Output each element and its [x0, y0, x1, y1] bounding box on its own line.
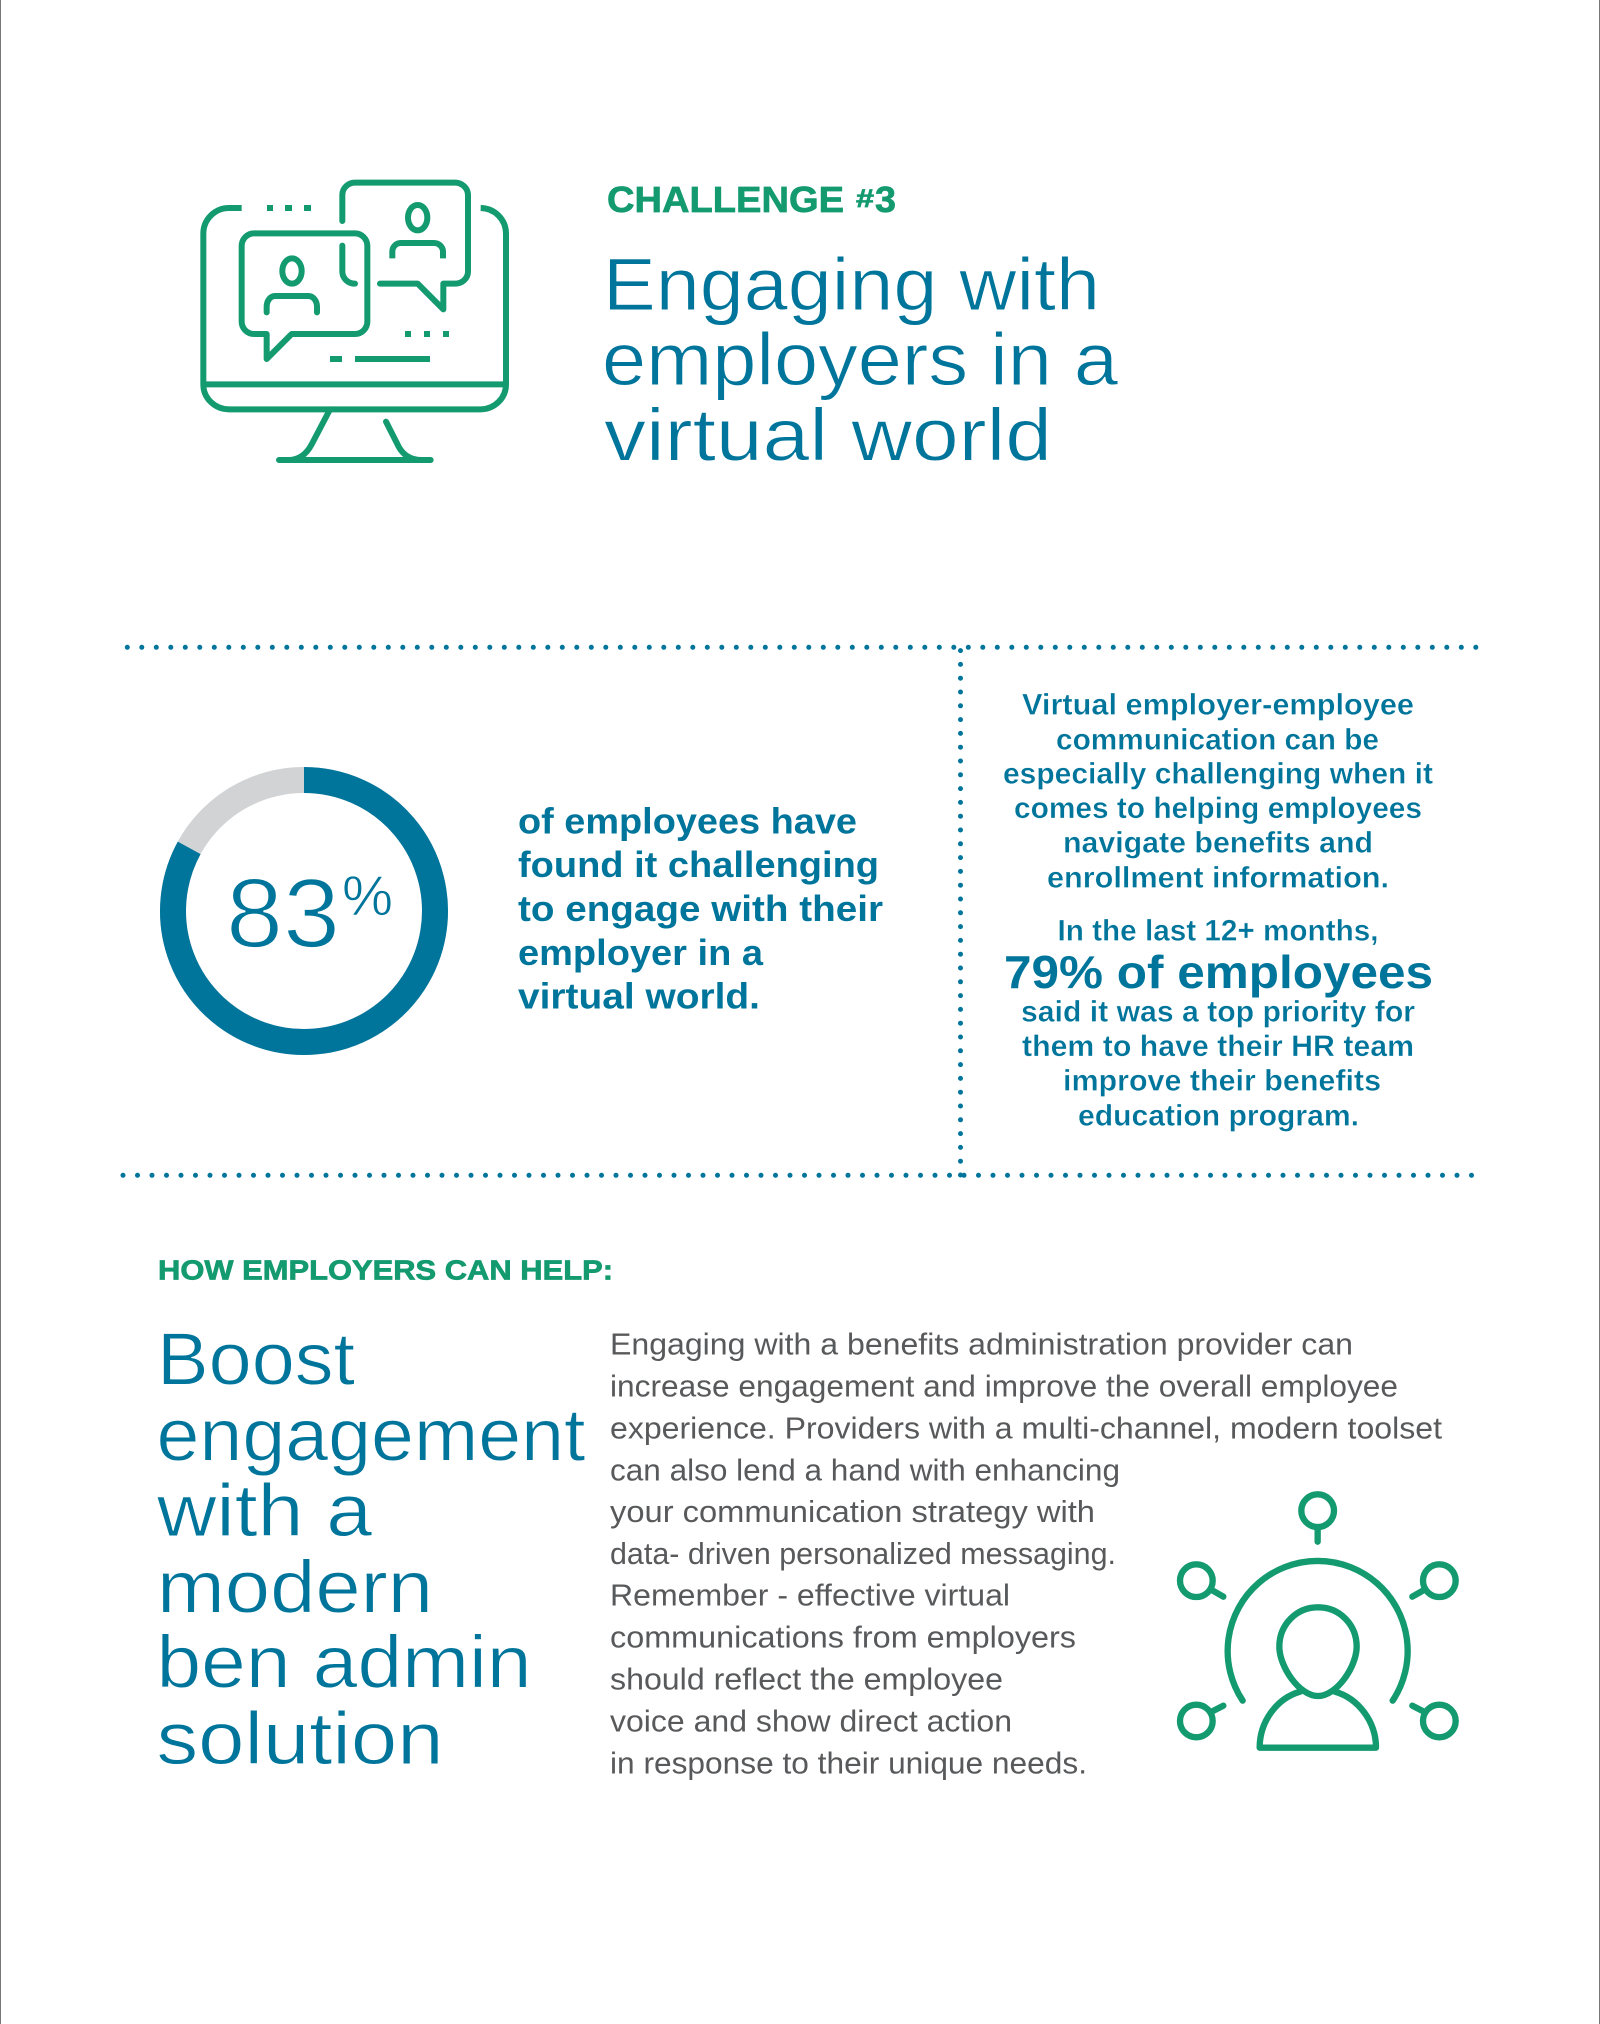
label: challenge number: 3: [875, 179, 896, 220]
heading: boost engagement: modern: [157, 1545, 433, 1628]
body text: your communication strategy with: [610, 1494, 1095, 1529]
divider: dotted top: [127, 645, 1478, 650]
stat description: 83 percent of employees: [518, 800, 883, 1016]
divider: dotted bottom: [123, 1173, 1474, 1178]
stat text: 79 percent of employees: In the last 12+ months,: [1058, 914, 1378, 948]
body text: should reflect the employee: [610, 1661, 1003, 1696]
text block: virtual communication challenge: comes to helping employees: [1014, 792, 1422, 825]
body text: Engaging with a benefits administration provider can: [610, 1327, 1353, 1362]
heading: boost engagement: [156, 1318, 586, 1780]
stat text: 79 percent of employees: improve their benefits: [1063, 1064, 1381, 1097]
icon: person surrounded by network nodes: [1180, 1494, 1456, 1748]
stat description: 83 percent of employees: employer in a: [518, 932, 764, 973]
text block: virtual communication challenge: communication can be: [1056, 723, 1379, 756]
divider: dotted vertical: [958, 650, 963, 1175]
text block: virtual communication challenge: Virtual employer-employee: [1022, 688, 1414, 721]
heading: boost engagement: solution: [156, 1697, 444, 1780]
donut chart: 83 percent: [173, 780, 435, 1042]
stat text: 79 percent of employees: education program.: [1078, 1099, 1359, 1132]
stat description: 83 percent of employees: of employees have: [518, 800, 857, 842]
body text: voice and show direct action: [610, 1704, 1012, 1738]
section label: how employers can help: HOW EMPLOYERS CAN HELP:: [158, 1254, 613, 1285]
stat text: 79 percent of employees: said it was a top priority for: [1021, 996, 1415, 1029]
title: Engaging with: [603, 243, 1100, 326]
stat text: 79 percent of employees: 79% of employees: [1004, 946, 1433, 998]
body text: in response to their unique needs.: [610, 1745, 1087, 1780]
label: challenge number: CHALLENGE: [607, 179, 844, 220]
stat description: 83 percent of employees: to engage with their: [518, 888, 883, 929]
title: employers in a: [602, 318, 1119, 401]
body text: [610, 1327, 1442, 1780]
stat description: 83 percent of employees: found it challenging: [518, 844, 879, 885]
donut chart: 83 percent: 83: [226, 858, 340, 968]
text block: virtual communication challenge: navigate benefits and: [1063, 826, 1373, 859]
body text: communications from employers: [610, 1620, 1076, 1655]
stat text: 79 percent of employees: them to have their HR team: [1022, 1030, 1414, 1063]
heading: boost engagement: ben admin: [156, 1620, 532, 1704]
label: challenge number: #: [856, 185, 874, 213]
body text: can also lend a hand with enhancing: [610, 1453, 1120, 1488]
donut chart: 83 percent: %: [342, 864, 393, 928]
heading: boost engagement: engagement: [156, 1394, 586, 1477]
title: [602, 243, 1119, 476]
text block: virtual communication challenge: [1003, 688, 1433, 894]
heading: boost engagement: Boost: [157, 1318, 355, 1401]
title: virtual world: [604, 394, 1052, 476]
body text: Remember - effective virtual: [610, 1578, 1010, 1613]
stat description: 83 percent of employees: virtual world.: [518, 976, 760, 1016]
icon: computer monitor with two chat bubbles: [203, 183, 506, 460]
body text: data- driven personalized messaging.: [610, 1536, 1116, 1571]
heading: boost engagement: with a: [156, 1469, 373, 1552]
stat text: 79 percent of employees: [1004, 914, 1433, 1132]
body text: experience. Providers with a multi-channel, modern toolset: [610, 1410, 1442, 1446]
body text: increase engagement and improve the overall employee: [610, 1369, 1398, 1404]
text block: virtual communication challenge: especially challenging when it: [1003, 758, 1433, 790]
text block: virtual communication challenge: enrollment information.: [1047, 861, 1389, 894]
